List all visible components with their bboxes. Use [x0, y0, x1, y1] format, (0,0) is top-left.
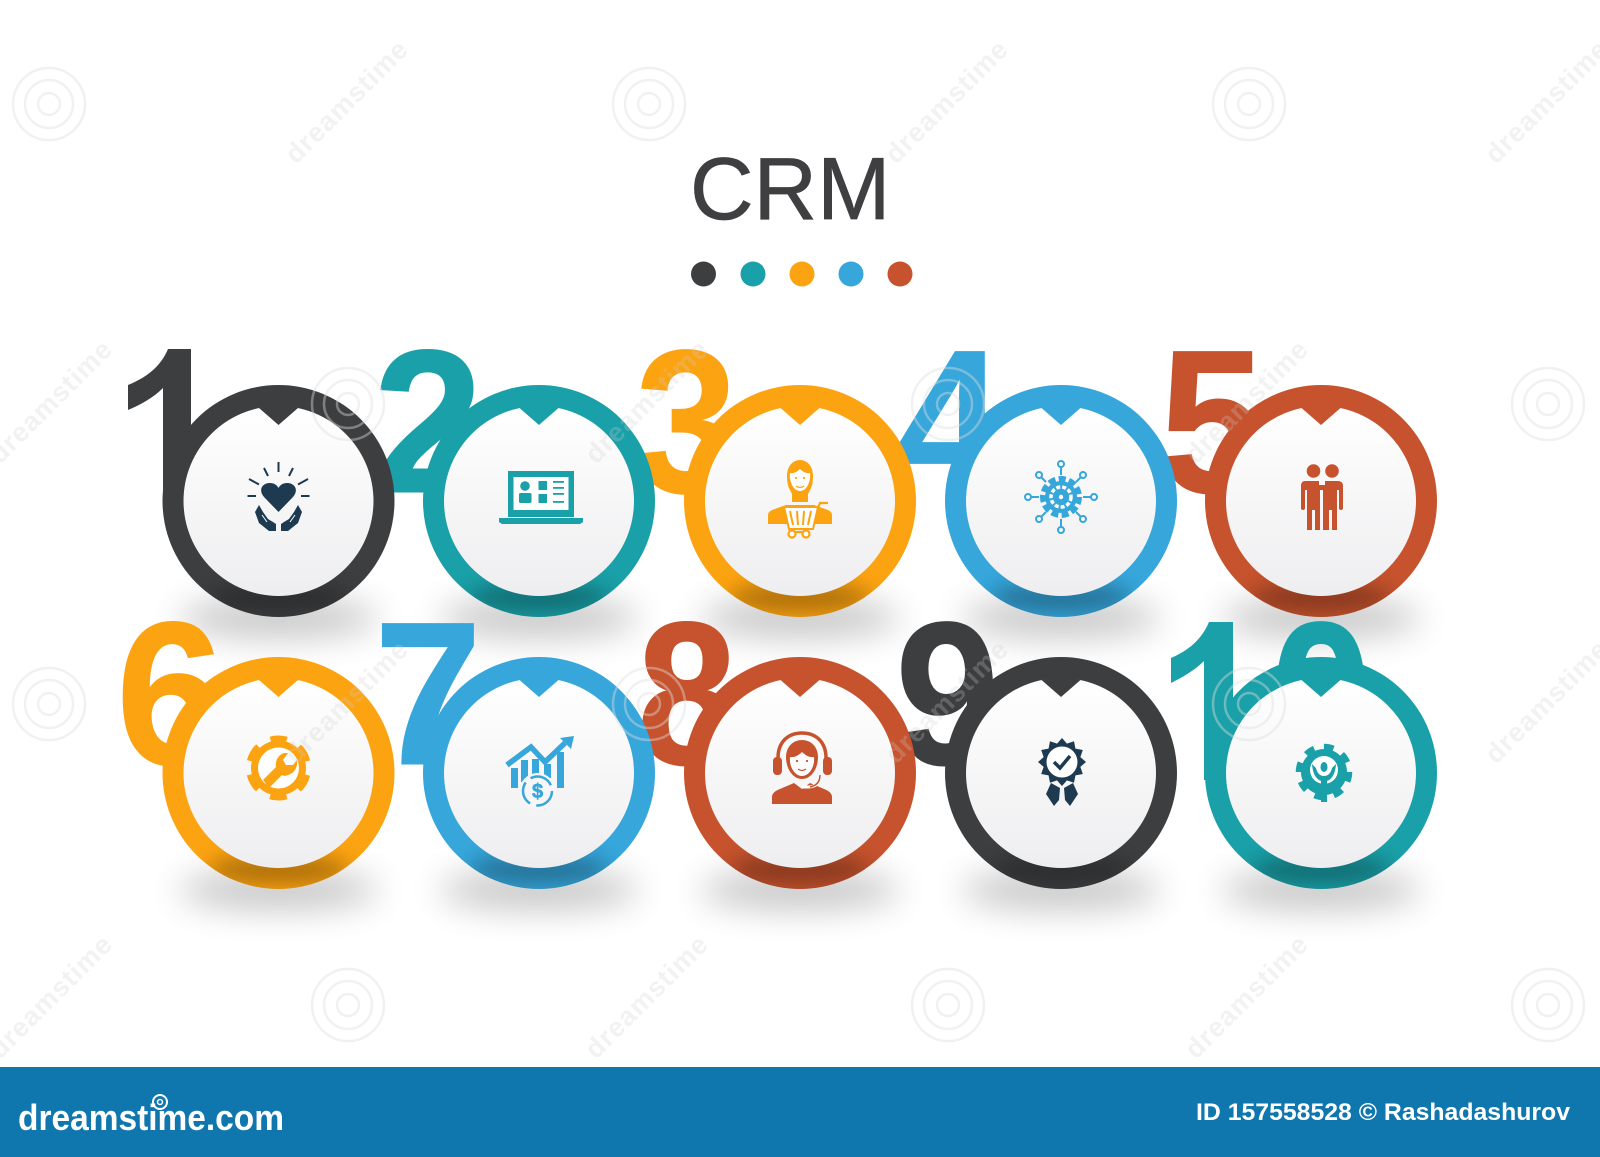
icon: support agent: [772, 733, 832, 804]
footer banner: [0, 1067, 1600, 1157]
icon: financial growth chart: $: [532, 781, 543, 803]
number 6: 6: [116, 580, 224, 808]
step 1: [113, 308, 394, 638]
number 10: [1171, 621, 1363, 780]
step 2: [373, 307, 655, 638]
step 8: [637, 579, 916, 910]
number 10: 0: [1270, 580, 1372, 808]
step 3: [635, 308, 916, 638]
number 2: 2: [373, 307, 483, 536]
watermarks: dreamstime: [579, 334, 714, 469]
step 4: [897, 308, 1177, 638]
icon: laptop profile: [499, 471, 583, 524]
number 3: 3: [635, 308, 738, 536]
footer logo text: dreamstime.com: [18, 1097, 284, 1138]
number 1: 1: [113, 308, 227, 536]
colour dots: [691, 262, 912, 286]
icon: award badge: [1038, 738, 1086, 806]
icon: financial growth chart: [507, 736, 574, 809]
step 6: [116, 580, 395, 910]
title: CRM: [690, 139, 890, 238]
watermarks: dreamstime: [879, 34, 1014, 169]
number 7: 7: [374, 580, 482, 808]
number 1: [128, 349, 191, 490]
watermarks: dreamstime: [279, 34, 414, 169]
number 9: 9: [895, 580, 1000, 808]
number 4: 4: [897, 308, 1003, 535]
icon: two people: [1301, 464, 1343, 530]
watermarks: dreamstime: [879, 634, 1014, 769]
number 5: 5: [1159, 307, 1265, 536]
number 10: 1: [1154, 580, 1268, 808]
icon: heart in hands: [248, 462, 310, 531]
watermarks: dreamstime: [279, 634, 414, 769]
icon: gear with wrench: [250, 740, 306, 796]
icon: customer with cart: [768, 460, 832, 538]
watermarks: dreamstime: [579, 929, 714, 1064]
watermarks: dreamstime: [1179, 334, 1314, 469]
step 10: [1154, 580, 1437, 910]
icon: gear network: [1025, 461, 1097, 533]
step 7: [374, 580, 655, 910]
footer credit text: ID 157558528 © Rashadashurov: [1196, 1099, 1571, 1126]
watermarks: dreamstime: [1179, 929, 1314, 1064]
icon: gear with person: [1300, 748, 1348, 802]
number 8: 8: [637, 579, 737, 808]
step 5: [1159, 307, 1437, 638]
step 9: [895, 580, 1177, 910]
